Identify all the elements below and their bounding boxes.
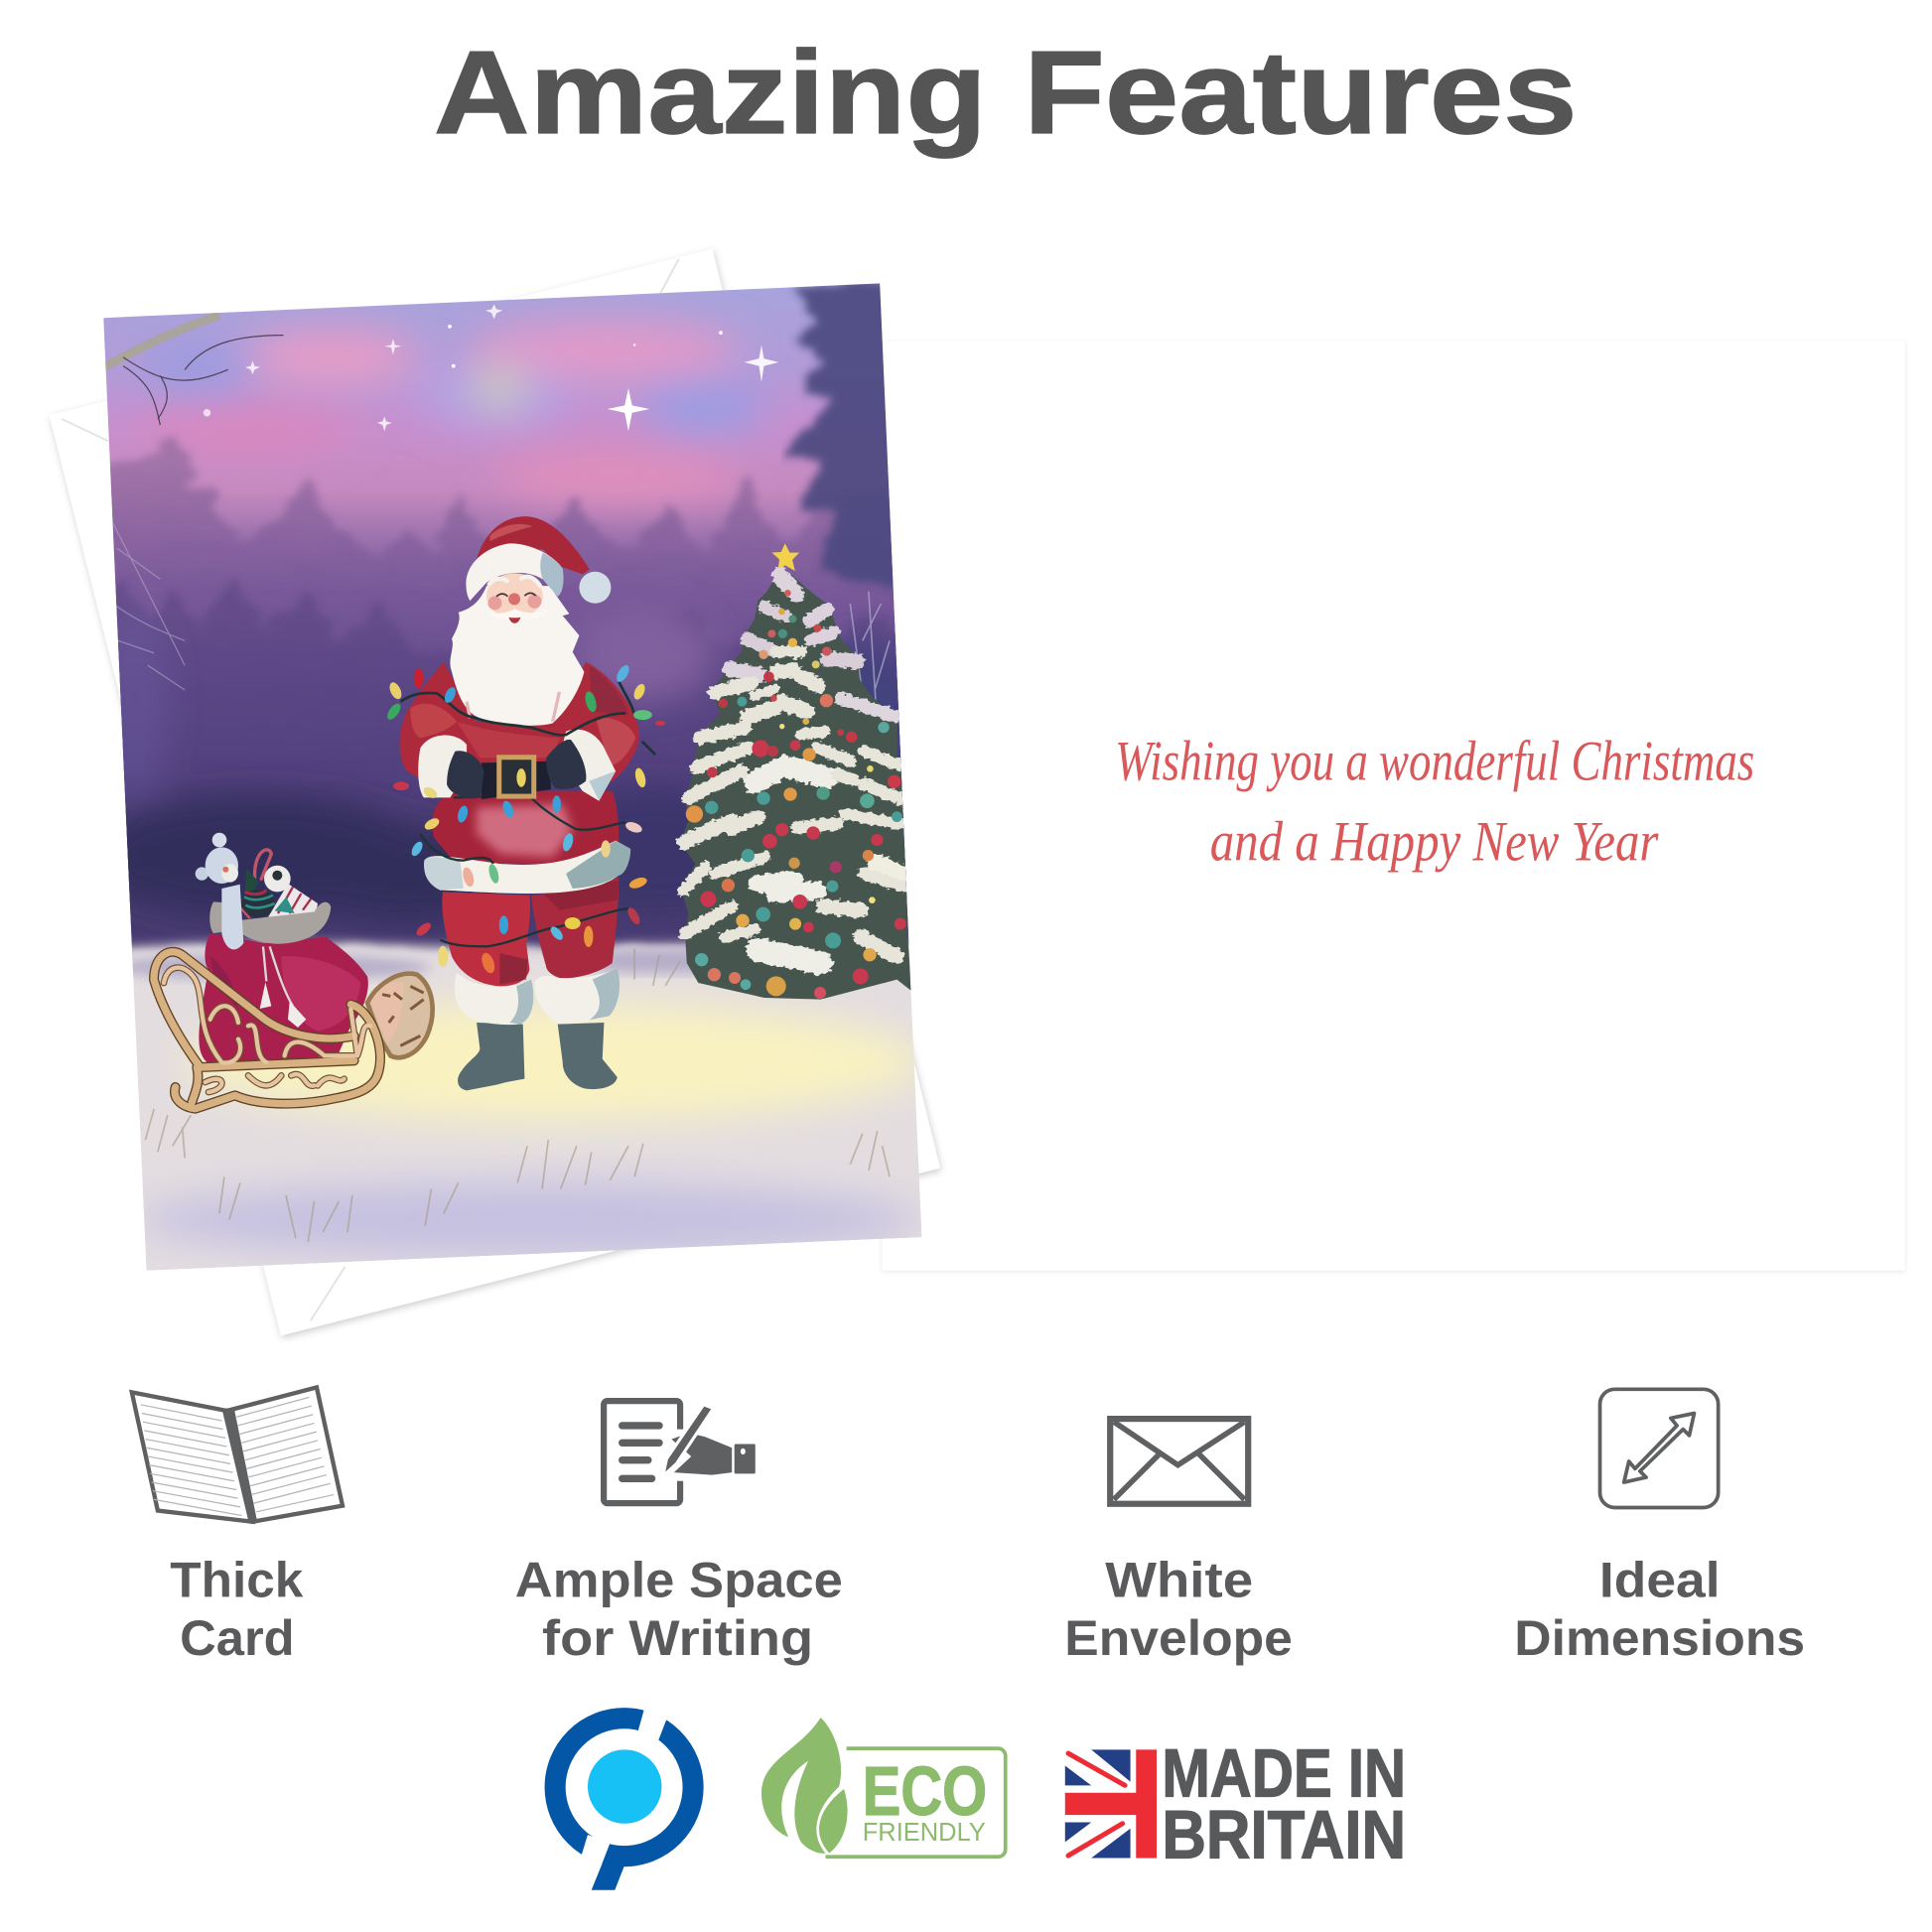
Santa upper body: [385, 516, 665, 801]
teddy bear: [196, 833, 238, 884]
tree star: [771, 543, 799, 571]
sleigh frame: [154, 952, 380, 1109]
feature: white envelope: [1064, 1419, 1293, 1666]
gloves: [447, 751, 483, 798]
logo: eco friendly: ECO: [863, 1752, 987, 1830]
cuffs: [418, 735, 467, 797]
panel: card front painting: [103, 284, 921, 1271]
upper light strings: [400, 682, 655, 755]
label: [1514, 1552, 1805, 1666]
label: Card: [180, 1610, 295, 1666]
hat: [477, 516, 590, 574]
sky clouds: [136, 322, 763, 501]
logo: made in Britain: MADE IN: [1162, 1735, 1406, 1811]
mid forest layer: [86, 579, 936, 949]
pants: [442, 892, 530, 986]
bare tree behind Christmas tree: [850, 592, 891, 701]
feature: thick card: [132, 1387, 343, 1666]
buckle: [499, 758, 534, 796]
logo: made in Britain: BRITAIN: [1162, 1798, 1406, 1873]
label: for Writing: [542, 1610, 813, 1666]
feature: ample space for writing: [515, 1401, 843, 1666]
logo: blue certification mark: [555, 1704, 693, 1890]
icon: resize arrow: [1600, 1389, 1719, 1507]
greeting message: [1115, 731, 1754, 873]
Santa lower body: [409, 791, 648, 1090]
label: White: [1105, 1552, 1253, 1607]
tree body: [680, 573, 911, 1000]
far runner: [367, 974, 433, 1057]
icon: envelope: [1110, 1419, 1248, 1504]
dark forest shadows: [86, 604, 924, 924]
torso: [433, 791, 619, 866]
lower light strings: [420, 795, 628, 946]
snow ground: [98, 943, 949, 1282]
dark pine top right: [781, 284, 894, 594]
label: Ideal: [1599, 1552, 1721, 1607]
label: [1064, 1552, 1293, 1666]
hat fur band: [466, 543, 563, 601]
stars: [204, 305, 778, 431]
lower bulbs: [409, 795, 648, 975]
label: Ample Space: [515, 1552, 843, 1607]
sack fur collar: [209, 901, 331, 944]
logo: eco friendly: [761, 1718, 1006, 1857]
boots: [458, 1023, 524, 1090]
branches top-left: [103, 316, 283, 425]
label: Dimensions: [1514, 1610, 1805, 1666]
hat pompom: [579, 572, 611, 604]
belt: [482, 761, 551, 799]
logo: eco friendly: FRIENDLY: [863, 1817, 986, 1847]
feature: ideal dimensions: [1514, 1389, 1805, 1666]
greeting message: Wishing you a wonderful Christmas: [1115, 731, 1754, 793]
logo: made in Britain: [1065, 1735, 1406, 1873]
grass tufts: [145, 949, 890, 1242]
sleigh with sack of toys: [154, 833, 433, 1109]
tree snow: [683, 576, 905, 963]
boot fur: [455, 973, 533, 1025]
white envelope behind card: [50, 249, 940, 1335]
tree ornaments: [686, 590, 906, 999]
toys: [236, 850, 318, 918]
label: [515, 1552, 843, 1666]
beard: [450, 586, 584, 726]
Santa Claus: [385, 516, 665, 1090]
forest background: [86, 438, 924, 949]
teddy arm: [221, 885, 243, 949]
sack: [199, 933, 368, 1065]
union flag: [1065, 1749, 1157, 1859]
coat arms: [400, 662, 639, 781]
sack cord: [260, 946, 306, 1028]
icon: folded card: [132, 1387, 343, 1523]
coat fur trim: [424, 841, 630, 894]
label: [170, 1552, 304, 1666]
bare branches left: [113, 523, 185, 690]
label: Envelope: [1064, 1610, 1293, 1666]
panel: inside of greeting card: [883, 342, 1905, 1271]
icon: hand writing on page: [604, 1401, 756, 1503]
title: Amazing Features: [434, 27, 1578, 159]
greeting message: and a Happy New Year: [1210, 810, 1659, 873]
face: [486, 573, 543, 619]
label: Thick: [170, 1552, 304, 1607]
upper bulbs: [385, 663, 665, 800]
Christmas tree: [680, 543, 911, 1000]
